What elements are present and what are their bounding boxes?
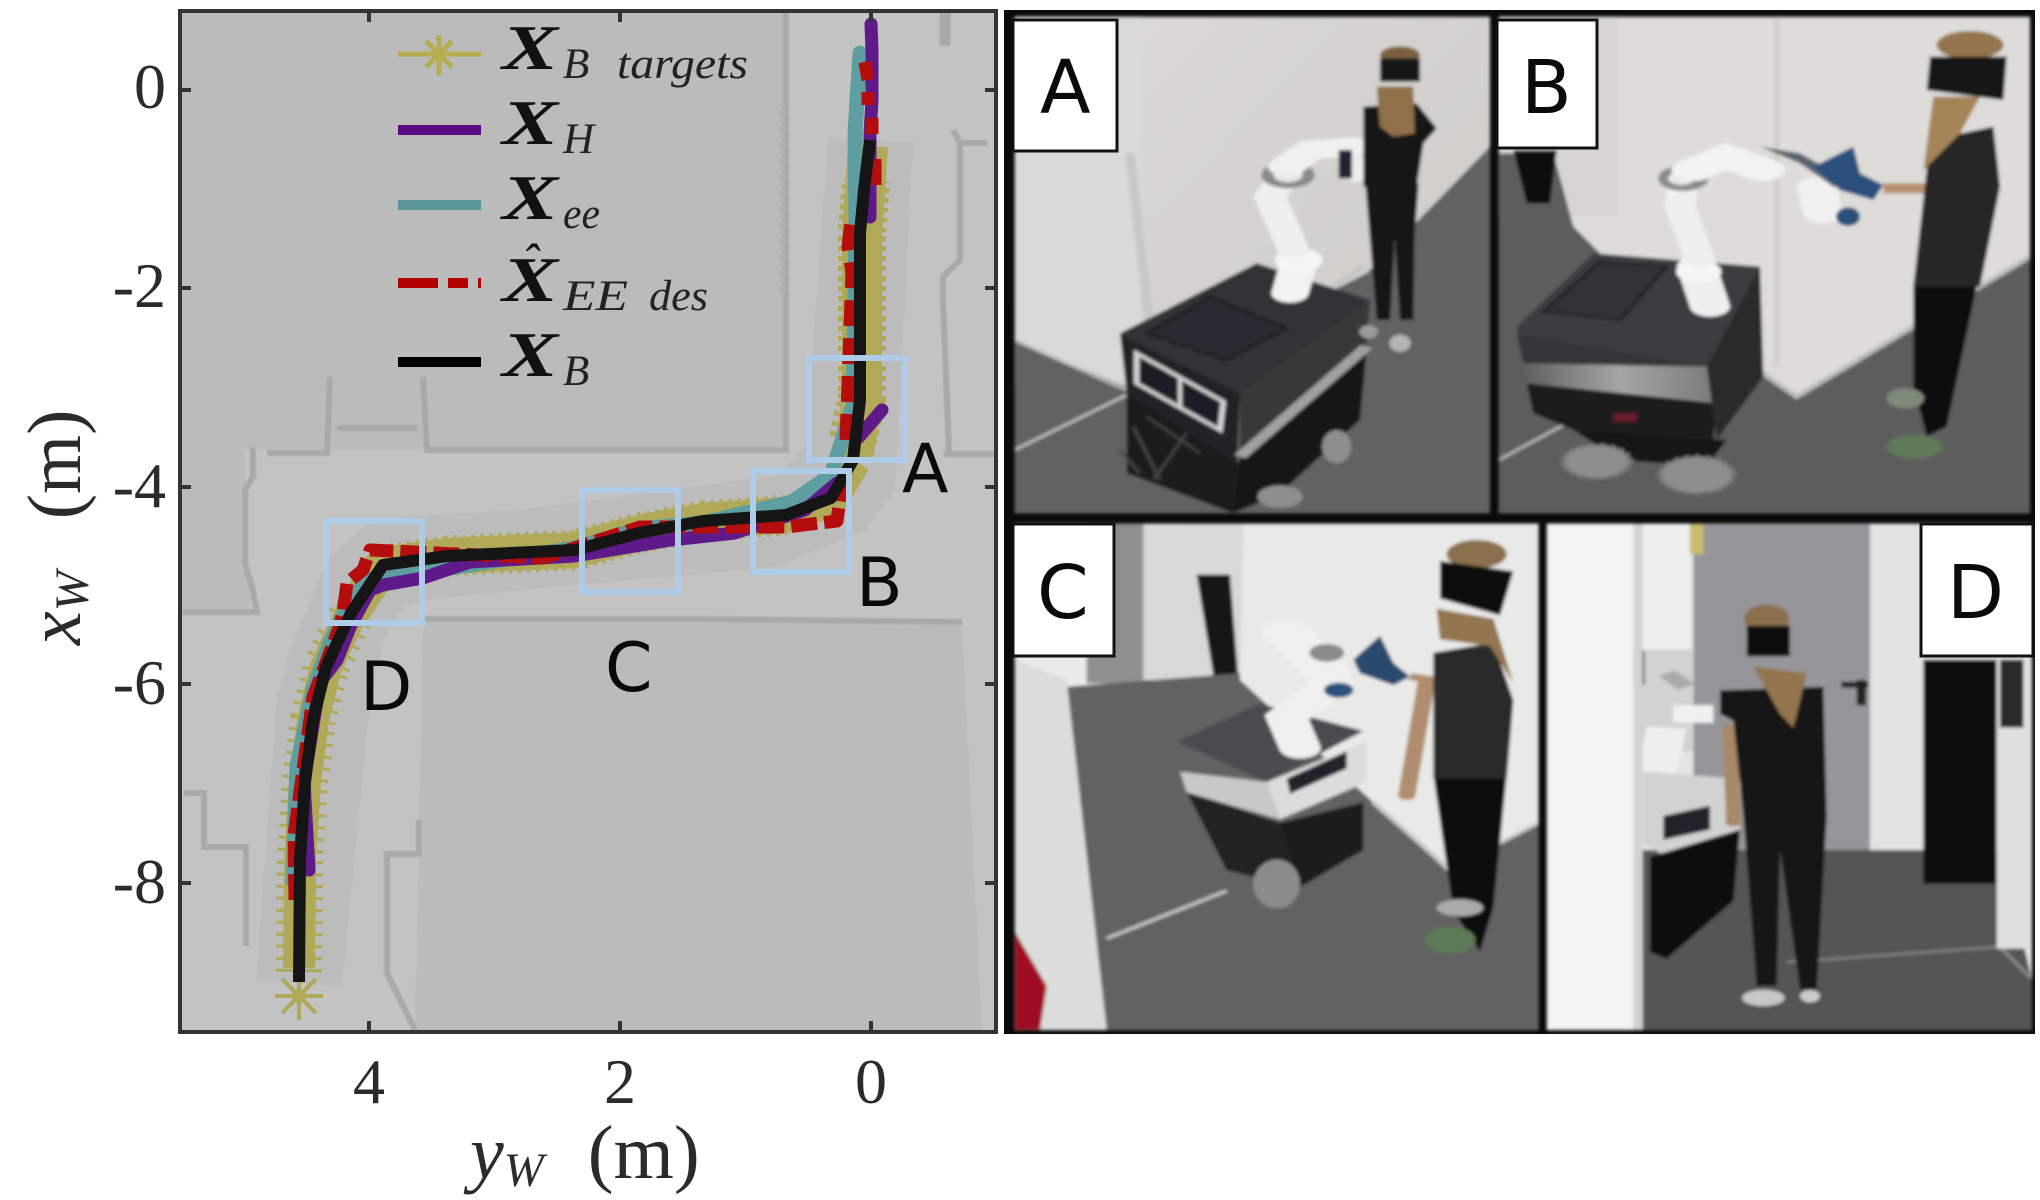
X_ee trajectory xyxy=(293,53,860,881)
y axis tick labels xyxy=(113,51,166,917)
label A: A xyxy=(1040,45,1091,131)
legend entry: X_H: X xyxy=(499,87,560,158)
label D xyxy=(1921,524,2033,656)
legend entry: X_B targets: targets xyxy=(617,41,748,88)
y axis tick labels: -8 xyxy=(113,846,166,917)
plot location letters: D xyxy=(360,648,412,727)
plot location letters xyxy=(360,430,949,727)
label C xyxy=(1013,524,1114,656)
plot location letters: A xyxy=(902,430,949,509)
y axis tick labels: -6 xyxy=(113,647,166,718)
label B xyxy=(1497,20,1597,148)
y axis tick labels: 0 xyxy=(134,51,166,122)
legend entry: X_EE des: X xyxy=(499,244,560,315)
X_H upper trajectory xyxy=(859,24,882,437)
legend entry: X_B: X xyxy=(499,319,560,390)
panel: photo frame xyxy=(1004,10,2035,1034)
legend entry: X_EE des: ˆ xyxy=(522,233,541,289)
label C: C xyxy=(1037,550,1089,636)
legend entry: X_ee: ee xyxy=(563,191,600,238)
label D: D xyxy=(1947,550,2004,636)
label B: B xyxy=(1521,45,1572,131)
legend entry: X_B targets xyxy=(398,12,748,88)
X_B targets trajectory xyxy=(275,146,868,1020)
y axis title: W xyxy=(46,567,99,611)
X_B base trajectory xyxy=(299,140,870,982)
plot location letters: C xyxy=(605,629,652,708)
X_EE des trajectory xyxy=(294,483,842,900)
y axis tick labels: -2 xyxy=(113,250,166,321)
legend entry: X_EE des: des xyxy=(649,273,708,320)
legend entry: X_B xyxy=(398,319,589,395)
legend entry: X_ee xyxy=(398,162,600,238)
plot axes frame and ticks xyxy=(180,11,996,1032)
photo C xyxy=(1013,524,1539,1030)
occupancy map background xyxy=(180,11,996,1032)
legend entry: X_B: B xyxy=(563,348,589,395)
plot location letters: B xyxy=(856,544,903,623)
trajectories xyxy=(275,24,882,1020)
y axis tick labels: -4 xyxy=(113,450,166,521)
legend entry: X_H xyxy=(398,87,596,163)
x axis tick labels: 0 xyxy=(855,1046,887,1117)
photo D xyxy=(1547,524,2033,1030)
x axis tick labels: 4 xyxy=(353,1046,385,1117)
highlight boxes A B C D xyxy=(326,358,905,623)
legend entry: X_EE des xyxy=(398,233,708,320)
legend entry: X_B targets: B xyxy=(563,41,589,88)
legend entry: X_EE des: EE xyxy=(562,273,628,320)
X_H trajectory xyxy=(304,483,837,870)
y axis title: (m) xyxy=(13,410,97,519)
photo A xyxy=(1013,17,1490,513)
panel: trajectory plot xyxy=(13,11,996,1197)
photo B xyxy=(1497,17,2030,513)
y axis title: x xyxy=(13,611,97,646)
label A xyxy=(1013,20,1117,151)
legend entry: X_H: H xyxy=(562,116,596,163)
x axis title: W xyxy=(504,1144,548,1197)
x axis tick labels: 2 xyxy=(604,1046,636,1117)
x axis tick labels xyxy=(353,1046,887,1117)
legend entry: X_B targets: X xyxy=(499,12,560,83)
x axis title: y xyxy=(463,1111,504,1195)
x axis title: (m) xyxy=(588,1111,700,1195)
legend entry: X_ee: X xyxy=(499,162,560,233)
X_EE des upper trajectory xyxy=(846,62,875,440)
legend xyxy=(398,12,748,395)
